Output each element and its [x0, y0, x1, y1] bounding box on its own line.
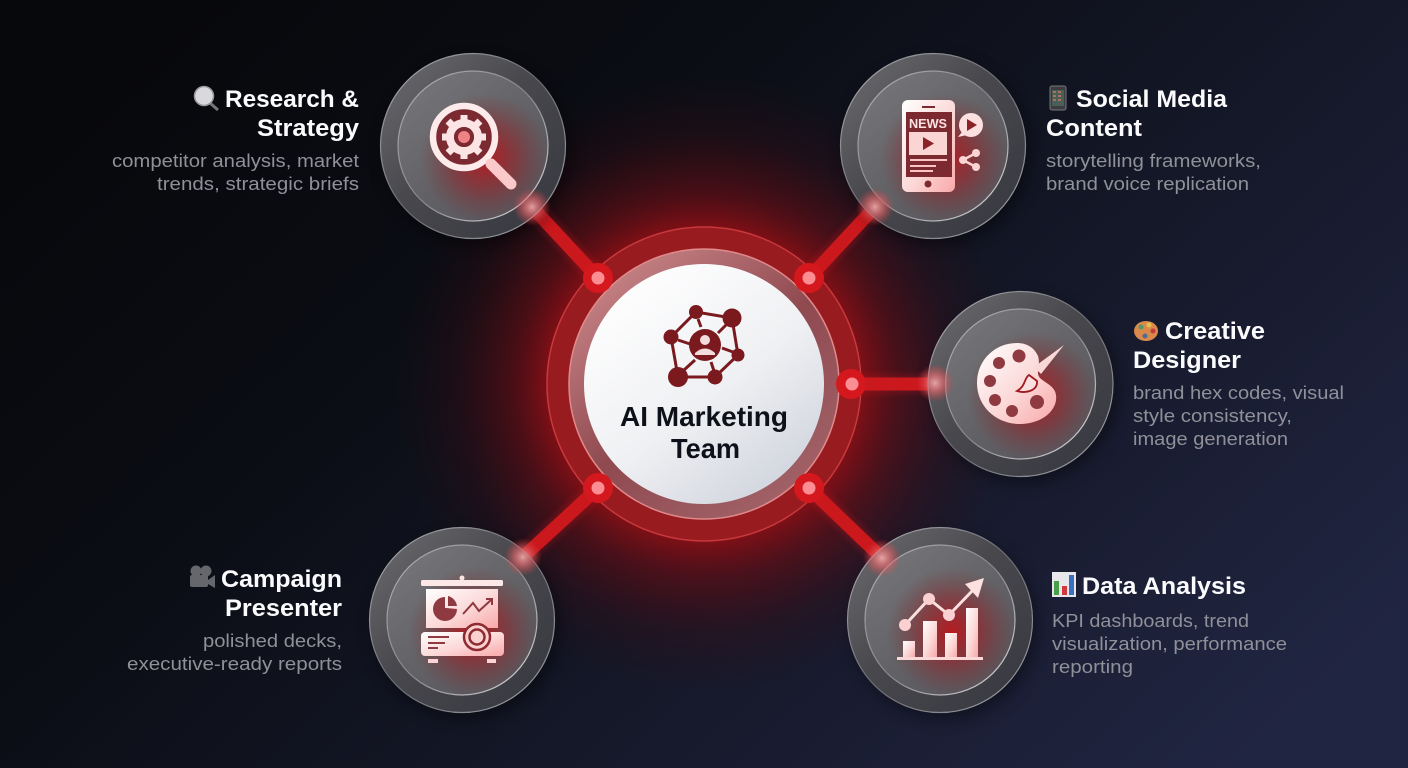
description: KPI dashboards, trend	[1052, 611, 1249, 631]
heading: Campaign	[221, 566, 342, 593]
node: campaign	[370, 528, 559, 719]
hub white disc	[584, 264, 824, 504]
description	[112, 151, 359, 194]
label: research	[112, 86, 360, 194]
description: trends, strategic briefs	[157, 174, 359, 194]
emoji: phone	[1050, 86, 1066, 110]
connector dots	[583, 263, 866, 503]
description: brand hex codes, visual	[1133, 383, 1344, 403]
node: social	[840, 54, 1030, 245]
central hub	[547, 227, 861, 541]
icon: projector and screen	[421, 576, 504, 663]
heading: Strategy	[257, 115, 360, 142]
icon: phone with news	[902, 100, 983, 192]
heading	[221, 566, 342, 622]
description: style consistency,	[1133, 406, 1292, 426]
hub middle ring	[569, 249, 839, 519]
center title line 2: Team	[671, 433, 740, 464]
description: competitor analysis, market	[112, 151, 359, 171]
center title: AI Marketing	[620, 401, 788, 432]
heading: Designer	[1133, 347, 1241, 374]
emoji: magnifier	[194, 86, 218, 110]
description: reporting	[1052, 657, 1133, 677]
red central glow	[394, 74, 1014, 694]
node: research	[380, 54, 570, 245]
description	[1052, 611, 1287, 677]
hub outer ring	[547, 227, 861, 541]
description: visualization, performance	[1052, 634, 1287, 654]
icon: magnifier with gear	[433, 106, 511, 184]
heading: Data Analysis	[1082, 573, 1246, 600]
emoji: movie camera	[190, 566, 215, 588]
label: social	[1046, 86, 1261, 194]
label: data	[1052, 572, 1287, 677]
icon: palette and brush	[977, 343, 1064, 424]
heading: Presenter	[225, 595, 342, 622]
heading	[1046, 86, 1228, 142]
label: campaign	[127, 566, 342, 674]
description	[127, 631, 342, 674]
description: brand voice replication	[1046, 174, 1249, 194]
description	[1046, 151, 1261, 194]
connectors	[523, 207, 935, 558]
description	[1133, 383, 1344, 449]
heading: Research &	[225, 86, 359, 113]
node: creative	[916, 292, 1118, 483]
description: polished decks,	[203, 631, 342, 651]
description: image generation	[1133, 429, 1288, 449]
heading: Creative	[1165, 318, 1265, 345]
icon: network team	[664, 305, 744, 387]
icon: bar chart with trend arrow	[897, 578, 984, 660]
description: executive-ready reports	[127, 654, 342, 674]
heading	[1133, 318, 1265, 374]
heading: Content	[1046, 115, 1142, 142]
node: data	[848, 528, 1037, 719]
label: creative	[1133, 318, 1344, 449]
heading	[225, 86, 360, 142]
emoji: bar chart	[1052, 572, 1076, 597]
emoji: palette	[1134, 321, 1158, 341]
heading: Social Media	[1076, 86, 1228, 113]
icon: phone with news: NEWS	[909, 116, 947, 131]
description: storytelling frameworks,	[1046, 151, 1261, 171]
